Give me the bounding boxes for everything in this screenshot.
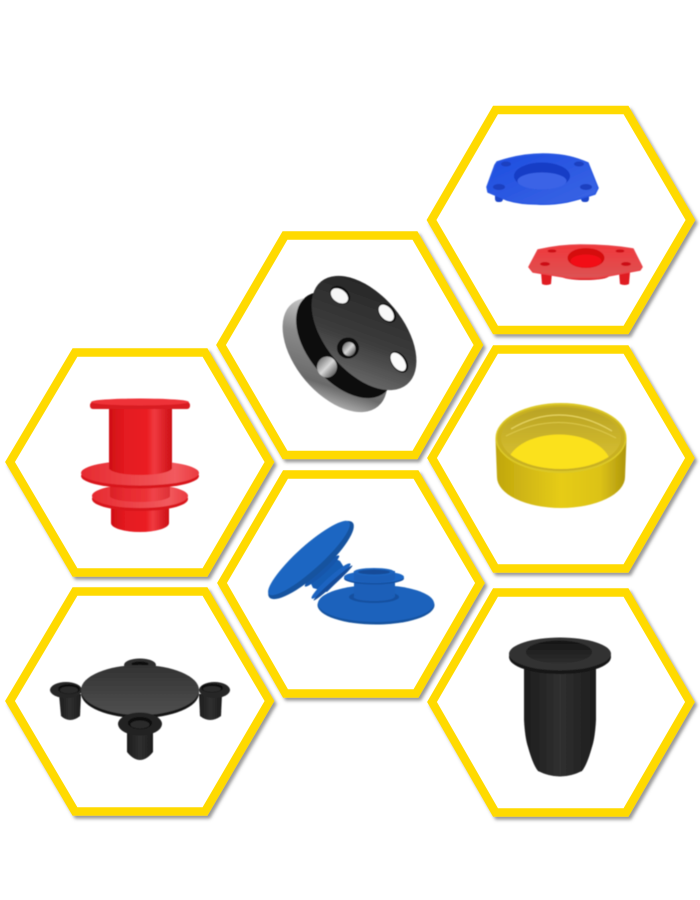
hexagon frame: centre bottom bbox=[222, 474, 480, 694]
hexagon frame: centre top bbox=[221, 236, 478, 455]
product: blue flanged plate bbox=[487, 154, 598, 204]
hexagon frame: left middle bbox=[10, 352, 270, 572]
product: black round spacer wheel bbox=[262, 257, 437, 431]
product: black flanged cup bbox=[509, 638, 611, 776]
hexagon frame: bottom left bbox=[10, 592, 270, 812]
hexagon frame: top right bbox=[432, 110, 690, 330]
product: black four-leg cap bbox=[50, 658, 230, 760]
product: red flanged plate bbox=[529, 245, 642, 285]
product: yellow screw cap bbox=[496, 403, 626, 508]
product: red spool bbox=[81, 398, 199, 532]
hexagon frame: bottom right bbox=[432, 592, 690, 812]
hexagon frame: right middle bbox=[432, 350, 690, 568]
product: blue double flanged plugs bbox=[259, 511, 434, 624]
